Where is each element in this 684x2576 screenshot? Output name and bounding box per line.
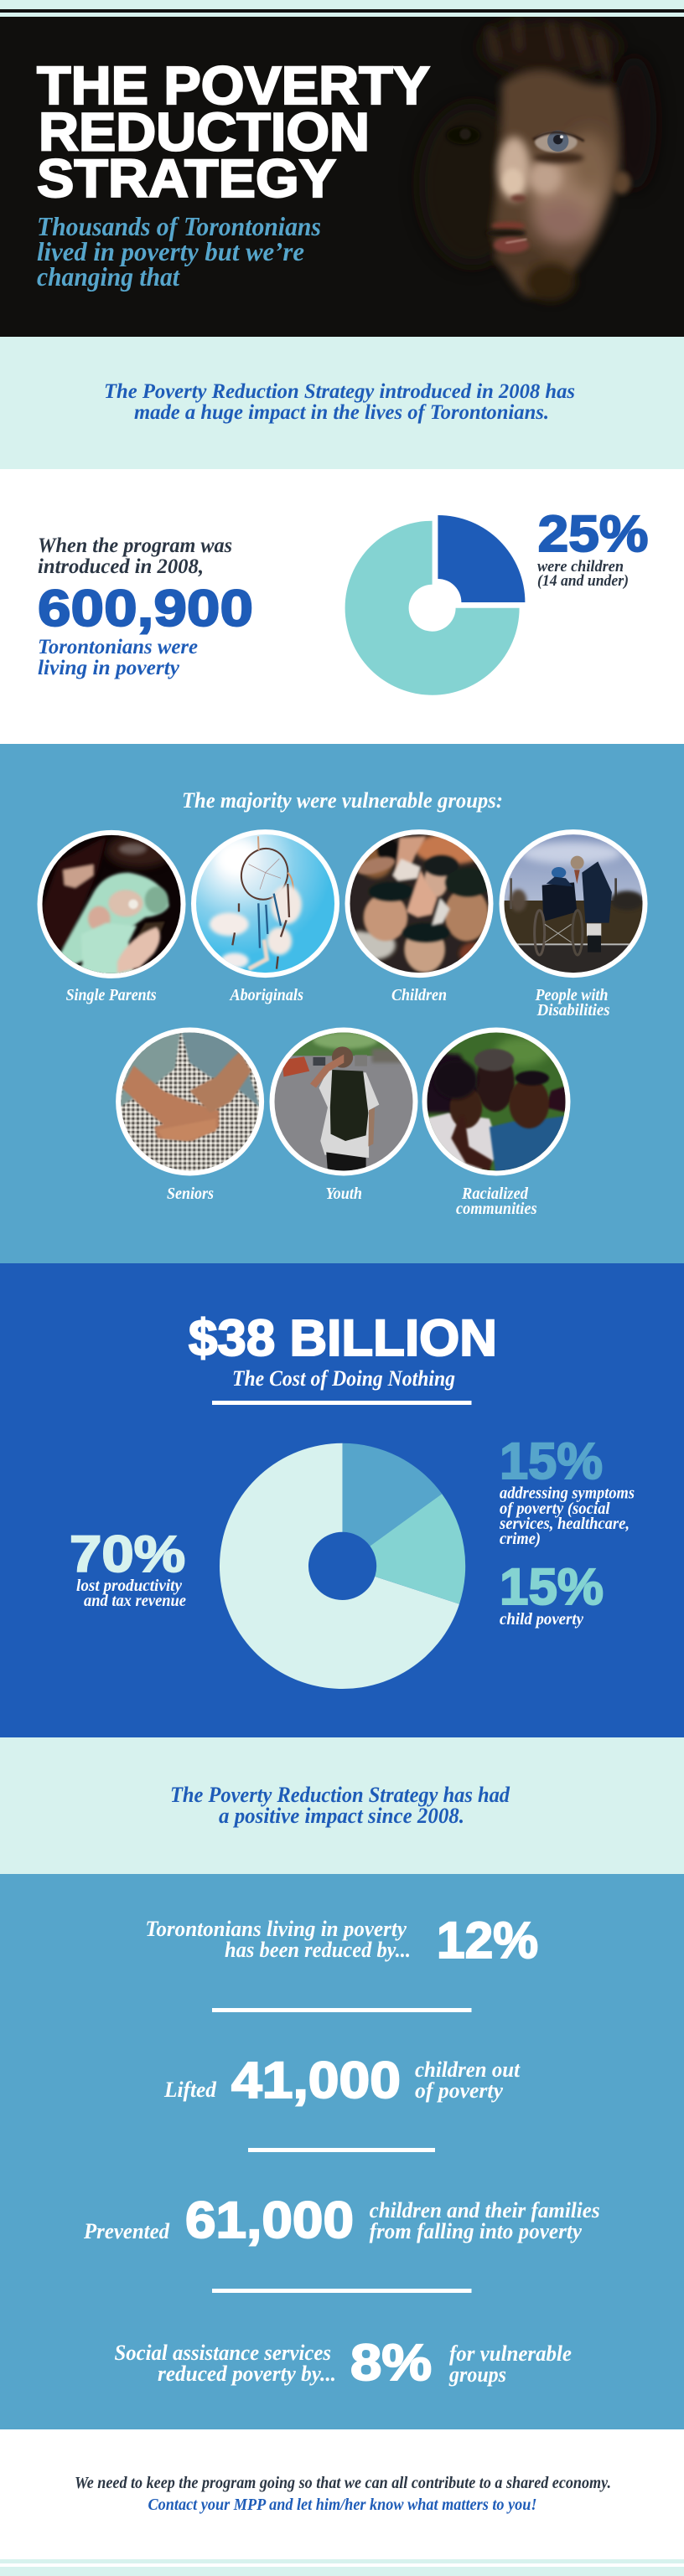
photo: Children bbox=[342, 829, 493, 978]
subtitle bbox=[37, 212, 321, 292]
stat: 15% symptoms bbox=[499, 1433, 635, 1548]
stat: 70%: lost productivity bbox=[76, 1577, 183, 1595]
background stripes top bbox=[0, 0, 684, 17]
donut chart: 25% children bbox=[345, 515, 525, 695]
photo: Youth bbox=[270, 1027, 417, 1176]
photo: Seniors bbox=[116, 1027, 264, 1176]
photo: People with Disabilities bbox=[500, 829, 647, 978]
result: 61,000: children and their families bbox=[370, 2198, 600, 2222]
label: Racialized communities: Racialized bbox=[461, 1185, 529, 1203]
stat: 15% symptoms: of poverty (social bbox=[500, 1500, 610, 1518]
closing statement: We need to keep the program going so that we can all contribute to a shared economy. bbox=[75, 2474, 611, 2492]
heading: The majority were vulnerable groups: bbox=[182, 788, 503, 813]
heading: $38 billion: $38 BILLION bbox=[189, 1309, 497, 1366]
label: Single Parents: Single Parents bbox=[66, 986, 157, 1004]
subtitle: lived in poverty but we’re bbox=[37, 237, 304, 266]
photo: Racialized communities bbox=[422, 1027, 572, 1176]
result: 41,000: Lifted bbox=[163, 2078, 217, 2102]
label: Children: Children bbox=[391, 986, 447, 1004]
subtitle: Thousands of Torontonians bbox=[37, 212, 321, 241]
label: Racialized communities bbox=[456, 1185, 537, 1218]
number: 25%: 25% bbox=[538, 505, 648, 562]
panel: 600,900 statistic bbox=[0, 469, 684, 744]
stat: 70%: 70% bbox=[70, 1525, 185, 1582]
result: 61,000: 61,000 bbox=[185, 2191, 354, 2248]
result: 41,000 bbox=[163, 2052, 521, 2109]
result: 12% bbox=[145, 1912, 538, 1969]
intro text: The Poverty Reduction Strategy introduced in 2008 has bbox=[104, 379, 575, 403]
title bbox=[37, 55, 430, 209]
hero photo: child's face bbox=[419, 17, 656, 302]
photo: Aboriginals bbox=[190, 829, 341, 978]
intro text: made a huge impact in the lives of Torontonians. bbox=[134, 400, 549, 424]
donut chart: cost breakdown bbox=[220, 1443, 465, 1689]
stat: 15% child poverty: child poverty bbox=[500, 1610, 584, 1629]
impact text: The Poverty Reduction Strategy has had bbox=[170, 1783, 510, 1807]
result: 41,000: 41,000 bbox=[231, 2052, 401, 2109]
label: Racialized communities: communities bbox=[456, 1200, 537, 1218]
panel: results bbox=[0, 1874, 684, 2429]
panel: vulnerable groups bbox=[0, 744, 684, 1263]
stat: 15% symptoms: 15% bbox=[500, 1433, 603, 1489]
background stripes bottom bbox=[0, 2559, 684, 2576]
stat: 70%: and tax revenue bbox=[84, 1592, 186, 1610]
title: REDUCTION bbox=[39, 102, 370, 163]
caption: children: were children bbox=[537, 559, 624, 576]
photo: single parents bbox=[34, 829, 193, 980]
result: 61,000: Prevented bbox=[83, 2219, 170, 2243]
statistic caption: Torontonians were bbox=[38, 634, 198, 658]
label: People with Disabilities: Disabilities bbox=[536, 1001, 610, 1020]
caption: children bbox=[537, 559, 629, 590]
label: Aboriginals: Aboriginals bbox=[229, 986, 303, 1004]
stat: 70% bbox=[70, 1525, 186, 1610]
title: STRATEGY bbox=[37, 148, 336, 209]
intro to statistic bbox=[38, 533, 232, 578]
subtitle: changing that bbox=[37, 262, 180, 292]
subheading: The Cost of Doing Nothing bbox=[232, 1366, 455, 1391]
result: 12%: Torontonians living in poverty bbox=[145, 1917, 407, 1941]
impact text: a positive impact since 2008. bbox=[219, 1804, 464, 1828]
panel: cost of doing nothing bbox=[0, 1263, 684, 1737]
result: 12%: has been reduced by... bbox=[225, 1938, 411, 1962]
intro to statistic: introduced in 2008, bbox=[38, 554, 204, 578]
result: 8% bbox=[114, 2334, 572, 2391]
stat: 15% child poverty: 15% bbox=[500, 1558, 604, 1615]
label: Seniors: Seniors bbox=[167, 1185, 214, 1203]
label: Youth: Youth bbox=[325, 1185, 362, 1203]
label: People with Disabilities bbox=[535, 986, 610, 1020]
caption: children: (14 and under) bbox=[537, 573, 629, 590]
panel: positive impact statement bbox=[0, 1737, 684, 1874]
statistic caption bbox=[38, 634, 198, 679]
result: 8%: for vulnerable bbox=[449, 2341, 572, 2366]
result: 12%: 12% bbox=[437, 1912, 538, 1969]
result: 61,000: from falling into poverty bbox=[370, 2219, 582, 2243]
result: 8%: 8% bbox=[350, 2334, 432, 2391]
intro to statistic: When the program was bbox=[38, 533, 232, 557]
statistic caption: living in poverty bbox=[38, 655, 180, 679]
call to action: Contact your MPP and let him/her know what matters to you! bbox=[148, 2496, 536, 2514]
panel: hero bbox=[0, 17, 684, 337]
intro text bbox=[104, 379, 575, 424]
result: 8%: groups bbox=[448, 2362, 506, 2387]
result: 61,000 bbox=[83, 2191, 600, 2248]
stat: 15% symptoms: services, healthcare, bbox=[499, 1515, 630, 1533]
title: THE POVERTY bbox=[37, 55, 430, 116]
panel: call to action footer bbox=[0, 2429, 684, 2559]
result: 8%: reduced poverty by... bbox=[158, 2362, 336, 2386]
result: 8%: Social assistance services bbox=[114, 2341, 331, 2365]
stat: 15% symptoms: addressing symptoms bbox=[500, 1484, 635, 1503]
result: 41,000: of poverty bbox=[415, 2078, 503, 2103]
label: People with Disabilities: People with bbox=[535, 986, 609, 1004]
result: 41,000: children out bbox=[415, 2057, 521, 2082]
stat: 15% symptoms: crime) bbox=[500, 1530, 541, 1548]
number: 600,900: 600,900 bbox=[38, 580, 253, 637]
panel: intro statement bbox=[0, 337, 684, 469]
impact text bbox=[170, 1783, 510, 1828]
